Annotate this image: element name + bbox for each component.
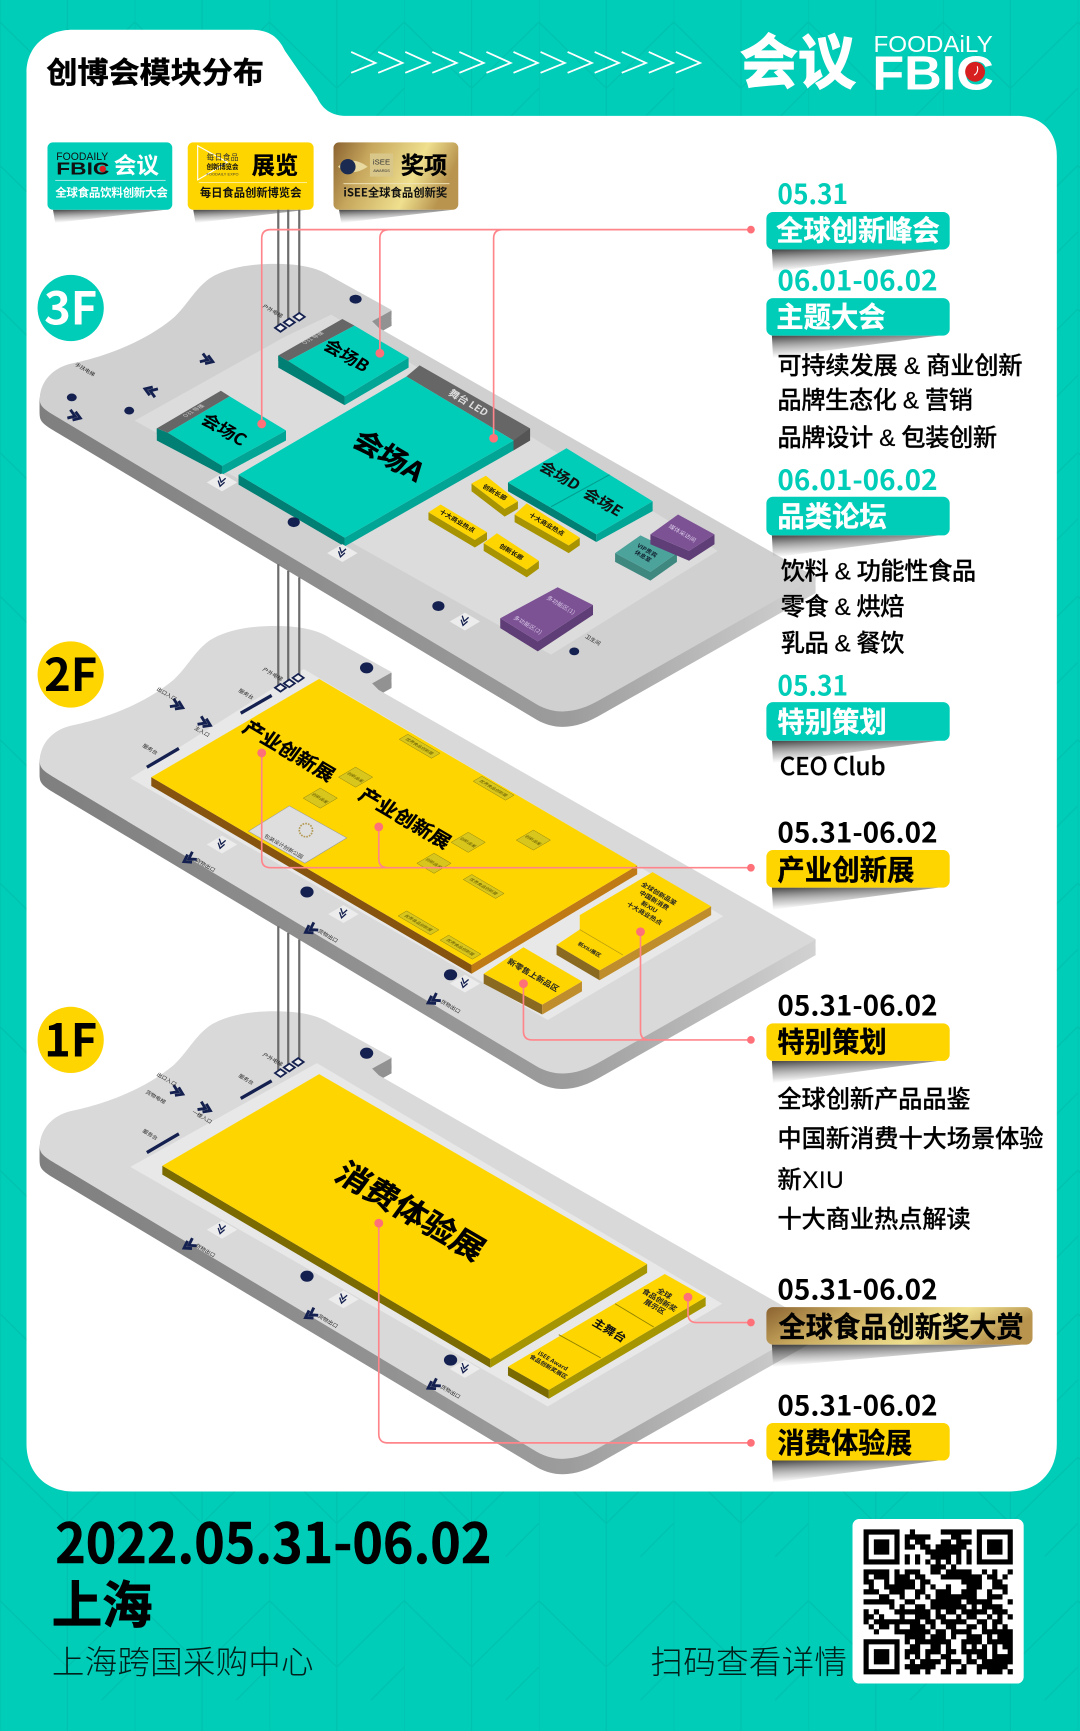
legend card: exhibition: 每日食品 — [207, 152, 239, 163]
innovation corridor booth south: 创新长廊 — [498, 542, 526, 562]
1F wayfinding icons: 出口入口 — [155, 1071, 179, 1088]
industry innovation hall: 产业创新展 — [238, 713, 342, 787]
schedule: industry innovation expo: 产业创新展 — [777, 848, 914, 889]
schedule: global food innovation awards — [766, 1267, 1033, 1367]
schedule: special projects: 十大商业热点解读 — [777, 1207, 971, 1234]
schedule: CEO Club: 05.31 — [777, 663, 848, 703]
1F wayfinding icons — [141, 1048, 480, 1400]
featured booth labels: 优秀食品创新展 — [467, 877, 500, 896]
awards strip: stage and showcase: 主舞台 — [589, 1314, 630, 1346]
schedule: special projects: 特别策划 — [777, 1020, 887, 1061]
schedule: global food innovation awards: 全球食品创新奖大赏 — [779, 1305, 1024, 1346]
awards strip: stage and showcase: 食品创新奖 — [640, 1286, 680, 1314]
schedule: special projects: 新XIU — [777, 1167, 844, 1194]
footer date: 2022.05.31-06.02 — [55, 1499, 491, 1579]
schedule: CEO Club — [766, 663, 950, 782]
global innovation tasting booth: 全球创新品鉴 — [640, 880, 679, 907]
legend card: exhibition: 每日食品创新博览会 — [200, 185, 302, 201]
legend card: conference: FBIC — [56, 158, 110, 178]
2F wayfinding icons: 货物出口 — [316, 927, 340, 944]
schedule: consumer experience expo: 消费体验展 — [777, 1421, 912, 1462]
footer venue: 上海跨国采购中心 — [52, 1637, 314, 1684]
floor badge 3F: 3F — [44, 273, 97, 339]
connector: special projects — [519, 927, 755, 1044]
hall B: O31 导播 — [300, 330, 326, 346]
innovation corridor booth north: 创新长廊 — [481, 482, 509, 503]
schedule: special projects: 全球创新产品品鉴 — [777, 1086, 971, 1113]
featured booths strip — [303, 734, 550, 959]
2F wayfinding icons — [141, 662, 480, 1015]
1F wayfinding icons: 货物出口 — [439, 1383, 462, 1400]
schedule: theme conference — [766, 258, 1023, 452]
global innovation tasting booth — [557, 872, 711, 980]
halls D and E: 会场E — [579, 483, 628, 521]
schedule: category forums: 零食 & 烘焙 — [781, 594, 904, 621]
footer city: 上海 — [52, 1564, 152, 1638]
schedule: category forums: 06.01-06.02 — [777, 458, 938, 498]
1F venue map — [141, 1048, 706, 1400]
awards strip: stage and showcase: 全球 — [655, 1285, 675, 1302]
3F wayfinding icons: 手扶电梯 — [73, 361, 97, 378]
1F wayfinding icons: 服务台 — [237, 1072, 256, 1086]
schedule: industry innovation expo — [766, 810, 950, 910]
featured booth labels: 优秀食品创新展 — [402, 913, 435, 933]
hall C — [157, 391, 286, 475]
halls D and E: 会场D — [535, 456, 585, 495]
1F floor plate — [40, 1011, 816, 1474]
hall A: 会场A — [346, 419, 434, 489]
legend card: awards — [333, 142, 458, 223]
3F wayfinding icons — [67, 295, 602, 655]
schedule: category forums: 品类论坛 — [777, 495, 887, 536]
hall A — [239, 365, 530, 546]
schedule: theme conference: 品牌设计 & 包装创新 — [777, 425, 997, 452]
3F wayfinding icons: 卫生间 — [584, 633, 602, 647]
3F floor plate — [40, 264, 816, 727]
awards strip: stage and showcase: 展示区 — [642, 1297, 668, 1317]
schedule: theme conference: 06.01-06.02 — [777, 258, 938, 298]
2F floor plate — [40, 626, 816, 1089]
schedule: theme conference: 品牌生态化 & 营销 — [777, 387, 973, 414]
multi-function rooms — [500, 587, 593, 651]
hall A: 舞台 LED — [446, 385, 492, 419]
1F wayfinding icons: 货物电梯 — [144, 1088, 168, 1106]
legend card: conference — [47, 142, 172, 223]
header chevron arrows — [351, 52, 700, 73]
title: 创博会模块分布 — [46, 48, 264, 92]
global innovation tasting booth: 新XIU展区 — [576, 940, 604, 959]
featured booth labels: 创新品鉴 — [310, 792, 331, 805]
featured booth labels: 创新品鉴 — [523, 834, 544, 847]
2F wayfinding icons: 户外电梯 — [261, 665, 285, 683]
2F wayfinding icons: 出口入口 — [155, 685, 179, 703]
trend booth right — [515, 503, 580, 553]
legend card: awards: iSEE全球食品创新奖 — [343, 185, 448, 201]
schedule: theme conference: 主题大会 — [776, 295, 886, 336]
3F wayfinding icons: 户外电梯 — [261, 302, 285, 320]
schedule: category forums: 乳品 & 餐饮 — [781, 630, 904, 657]
global innovation tasting booth: 中国新消费 — [637, 888, 672, 912]
schedule: category forums — [766, 458, 976, 657]
floor badge 2F: 2F — [44, 639, 97, 705]
awards strip: stage and showcase: iSEE Award — [536, 1349, 570, 1373]
legend card: conference: 全球食品饮料创新大会 — [55, 185, 168, 201]
awards strip: stage and showcase: 食品创新奖展区 — [528, 1352, 570, 1381]
industry innovation hall — [151, 679, 637, 974]
VIP lounge: 休息室 — [633, 548, 654, 564]
FBIC logo: FOODAiLY — [873, 31, 993, 57]
connector: consumer experience — [374, 1219, 755, 1447]
2F wayfinding icons: 服务台 — [237, 687, 256, 701]
global innovation tasting booth: 十大商业热点 — [625, 900, 665, 927]
hall B: 会场B — [319, 333, 375, 377]
FBIC logo: FBIC — [872, 46, 994, 100]
2F wayfinding icons: 服务台 — [141, 742, 160, 756]
new retail booth — [484, 947, 582, 1015]
global innovation tasting booth: 新XIU — [639, 899, 660, 915]
featured booth labels: 优秀食品创新展 — [444, 938, 477, 957]
VIP lounge: VIP贵宾 — [635, 540, 660, 559]
schedule: CEO Club: CEO Club — [780, 747, 886, 782]
featured booth labels: 优秀食品创新展 — [403, 737, 436, 756]
innovation corridor booth south — [484, 533, 539, 577]
connector: industry innovation — [257, 748, 755, 872]
1F wayfinding icons: 一楼入口 — [190, 1108, 214, 1125]
1F wayfinding icons: 货物出口 — [194, 1242, 217, 1259]
featured booth labels: 创新品鉴 — [345, 771, 367, 784]
schedule: special projects: 05.31-06.02 — [777, 984, 938, 1024]
featured booth labels: 创新品鉴 — [423, 857, 445, 870]
legend card: awards: iSEE — [373, 157, 390, 166]
QR code — [853, 1519, 1024, 1684]
1F wayfinding icons: 户外电梯 — [261, 1051, 285, 1068]
legend card: exhibition: 展览 — [252, 146, 298, 180]
1F wayfinding icons: 货物出口 — [316, 1312, 340, 1330]
2F wayfinding icons: 主入口 — [193, 724, 212, 739]
connector: awards — [684, 1293, 755, 1326]
connector: global summit — [257, 226, 755, 443]
2F wayfinding icons: 货物出口 — [194, 856, 217, 874]
awards strip: stage and showcase — [508, 1274, 706, 1399]
halls D and E — [508, 448, 653, 542]
schedule: consumer experience expo: 05.31-06.02 — [777, 1383, 938, 1423]
press room — [650, 514, 714, 561]
3F venue map — [67, 295, 714, 655]
hall C: O31 导播 — [180, 403, 207, 418]
schedule: special projects: 中国新消费十大场景体验 — [777, 1126, 1044, 1153]
schedule: consumer experience expo — [766, 1383, 950, 1483]
elevator shafts — [278, 210, 299, 1073]
innovation corridor booth north — [472, 476, 518, 517]
legend card: awards: AWARDS — [373, 169, 390, 173]
consumer experience hall — [162, 1074, 647, 1368]
legend card: exhibition: FOODAILY EXPO — [207, 173, 239, 177]
schedule: category forums: 饮料 & 功能性食品 — [781, 559, 976, 586]
legend card: exhibition: 创新博览会 — [207, 161, 239, 171]
featured booth labels: 创新品鉴 — [457, 836, 479, 849]
trend booth right: 十大商业热点 — [527, 511, 567, 538]
design park booth — [248, 806, 347, 863]
legend card: conference: 会议 — [114, 147, 159, 180]
schedule: global summit — [766, 172, 950, 272]
industry innovation hall: 产业创新展 — [354, 780, 458, 854]
schedule: special projects — [766, 984, 1044, 1234]
trend booth left — [428, 505, 487, 548]
schedule: theme conference: 可持续发展 & 商业创新 — [777, 353, 1023, 380]
multi-function rooms: 多功能区(2) — [512, 613, 544, 636]
VIP lounge — [615, 535, 677, 581]
schedule: industry innovation expo: 05.31-06.02 — [777, 810, 938, 850]
legend card: exhibition — [188, 142, 314, 223]
2F wayfinding icons: 货物出口 — [439, 998, 462, 1015]
legend card: conference: FOODAILY — [56, 151, 109, 163]
legend card: awards: 奖项 — [401, 146, 447, 180]
hall C: 会场C — [196, 407, 253, 452]
new retail booth: 新零售上新品区 — [505, 956, 561, 994]
schedule: global summit: 05.31 — [777, 172, 848, 212]
1F wayfinding icons: 服务台 — [141, 1127, 160, 1142]
schedule: global summit: 全球创新峰会 — [776, 209, 940, 250]
consumer experience hall: 消费体验展 — [327, 1150, 496, 1270]
floor badge 1F: 1F — [44, 1004, 97, 1070]
scan prompt: 扫码查看详情 — [650, 1637, 847, 1684]
2F venue map — [141, 662, 711, 1015]
design park booth: 包装设计创新公园 — [263, 832, 305, 861]
trend booth left: 十大商业热点 — [438, 507, 478, 535]
multi-function rooms: 多功能区(1) — [545, 593, 577, 616]
schedule: CEO Club: 特别策划 — [777, 700, 887, 741]
featured booth labels: 优秀食品创新展 — [477, 779, 510, 798]
hall B — [278, 319, 409, 405]
schedule: global food innovation awards: 05.31-06.02 — [777, 1267, 938, 1307]
featured booth labels — [310, 737, 544, 957]
header heading: conference: 会议 — [740, 15, 856, 100]
press room: 媒体采访间 — [667, 522, 698, 544]
